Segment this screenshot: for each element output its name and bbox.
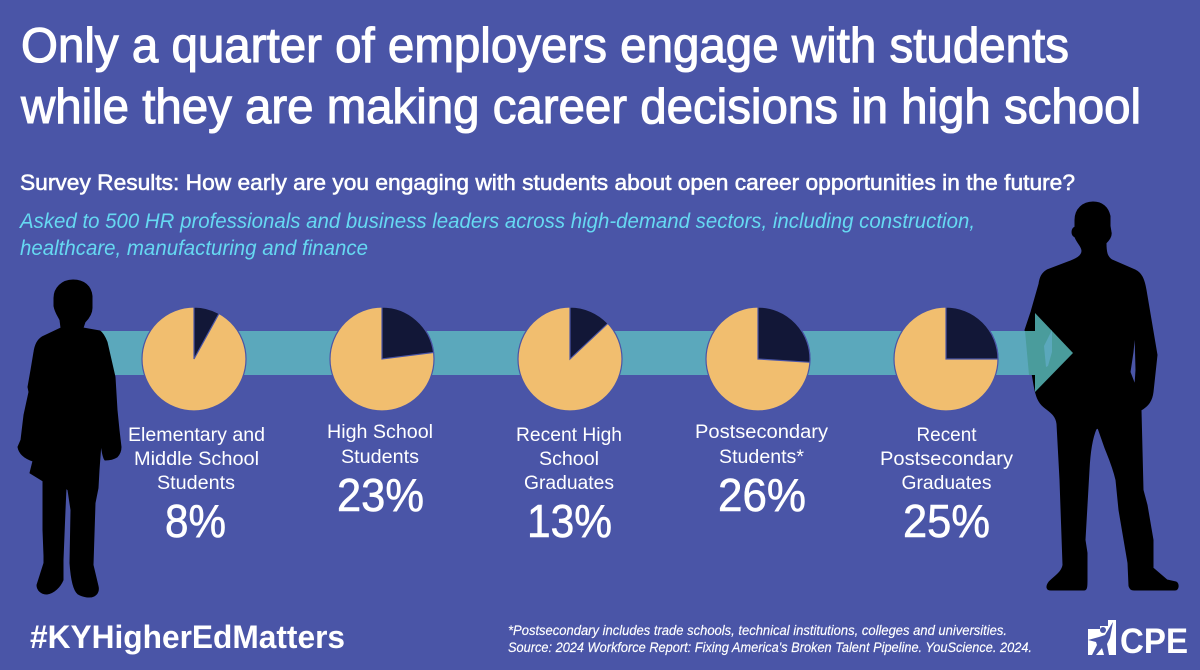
label: high school (327, 422, 433, 521)
pie: recent postsecondary graduates 25% (894, 307, 998, 411)
label: recent postsecondary graduates: 25% (903, 495, 990, 547)
label: recent high school graduates (516, 425, 622, 547)
label: elementary and middle school: Middle School (134, 449, 259, 470)
title: while they are making career decisions in high school (20, 80, 1141, 134)
pie: elementary and middle school 8% (142, 307, 246, 411)
label: recent postsecondary graduates: Graduates (902, 473, 992, 494)
footnote and source: *Postsecondary includes trade schools, technical institutions, colleges and universities. (508, 623, 1007, 638)
CPE logo: CPE (1120, 622, 1188, 661)
arrow head (1025, 313, 1073, 392)
label: high school: Students (341, 447, 419, 468)
silhouette: adult (1025, 202, 1178, 590)
label: recent postsecondary graduates (880, 425, 1014, 547)
label: postsecondary students (695, 422, 829, 521)
pie: high school 23% (330, 307, 434, 411)
label: high school: High School (327, 422, 433, 443)
pie: postsecondary students 26% (706, 307, 810, 411)
title (20, 19, 1141, 134)
survey description: healthcare, manufacturing and finance (20, 237, 368, 260)
label: elementary and middle school: 8% (165, 495, 226, 547)
survey question heading: Survey Results: How early are you engaging with students about open career opportunities in the future? (20, 170, 1075, 195)
label: postsecondary students: Students* (719, 447, 805, 468)
label: recent high school graduates: Graduates (524, 473, 614, 494)
footnote and source (508, 623, 1032, 655)
label: recent high school graduates: Recent High (516, 425, 622, 446)
footnote and source: Source: 2024 Workforce Report: Fixing America's Broken Talent Pipeline. YouScience. 2024. (508, 640, 1032, 655)
label: postsecondary students: Postsecondary (695, 422, 829, 443)
timeline band (90, 331, 1035, 375)
label: recent high school graduates: 13% (527, 495, 612, 547)
silhouette: child (18, 280, 121, 597)
label: elementary and middle school (128, 425, 265, 547)
CPE logo (1088, 620, 1188, 661)
pie: recent high school graduates 13% (518, 307, 622, 411)
hashtag: #KYHigherEdMatters (30, 619, 345, 655)
label: recent postsecondary graduates: Postsecondary (880, 449, 1014, 470)
survey description: Asked to 500 HR professionals and business leaders across high-demand sectors, including construction, (18, 210, 975, 233)
label: recent postsecondary graduates: Recent (916, 425, 977, 446)
survey description (18, 210, 975, 260)
label: elementary and middle school: Elementary and (128, 425, 265, 446)
label: high school: 23% (337, 469, 424, 521)
label: recent high school graduates: School (539, 449, 599, 470)
label: postsecondary students: 26% (718, 469, 806, 521)
title: Only a quarter of employers engage with students (21, 19, 1069, 73)
label: elementary and middle school: Students (157, 473, 235, 494)
